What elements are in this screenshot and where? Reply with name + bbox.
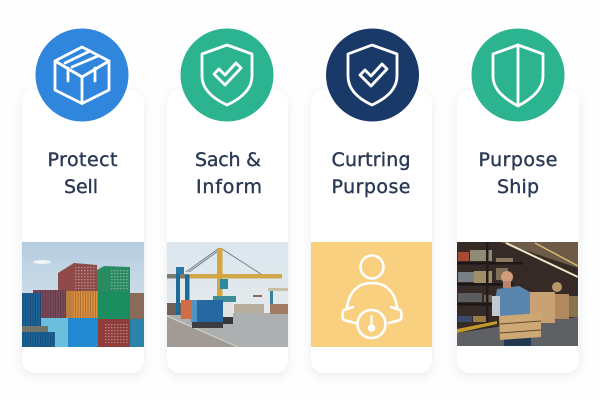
panel: curtring purpose — [311, 90, 432, 373]
heading: curtring purpose: Curtring — [332, 149, 410, 171]
icon: navy shield check badge — [326, 28, 419, 122]
panel: protect sell — [22, 90, 144, 373]
icon: green split shield badge — [472, 28, 564, 122]
illustration: person with badge on yellow — [311, 242, 432, 347]
heading: curtring purpose: Purpose — [332, 176, 410, 198]
photo: stacked shipping containers — [22, 242, 144, 347]
heading: purpose ship — [478, 149, 558, 198]
heading: sach and inform: Inform — [196, 176, 262, 198]
icon: green shield check badge — [180, 28, 274, 122]
heading: curtring purpose — [332, 149, 410, 198]
photo: port crane and trucks — [167, 242, 288, 347]
icon: blue box badge — [36, 28, 128, 122]
heading: protect sell: Sell — [64, 176, 98, 198]
panel: sach and inform — [167, 90, 288, 373]
heading: sach and inform — [195, 149, 262, 198]
heading: purpose ship: Purpose — [478, 149, 558, 171]
heading: protect sell: Protect — [48, 149, 118, 171]
photo: warehouse worker carrying boxes — [457, 242, 578, 347]
icon: person — [342, 256, 402, 338]
heading: protect sell — [48, 149, 118, 198]
panel: purpose ship — [457, 90, 579, 373]
heading: purpose ship: Ship — [497, 176, 539, 198]
heading: sach and inform: Sach & — [195, 149, 261, 171]
